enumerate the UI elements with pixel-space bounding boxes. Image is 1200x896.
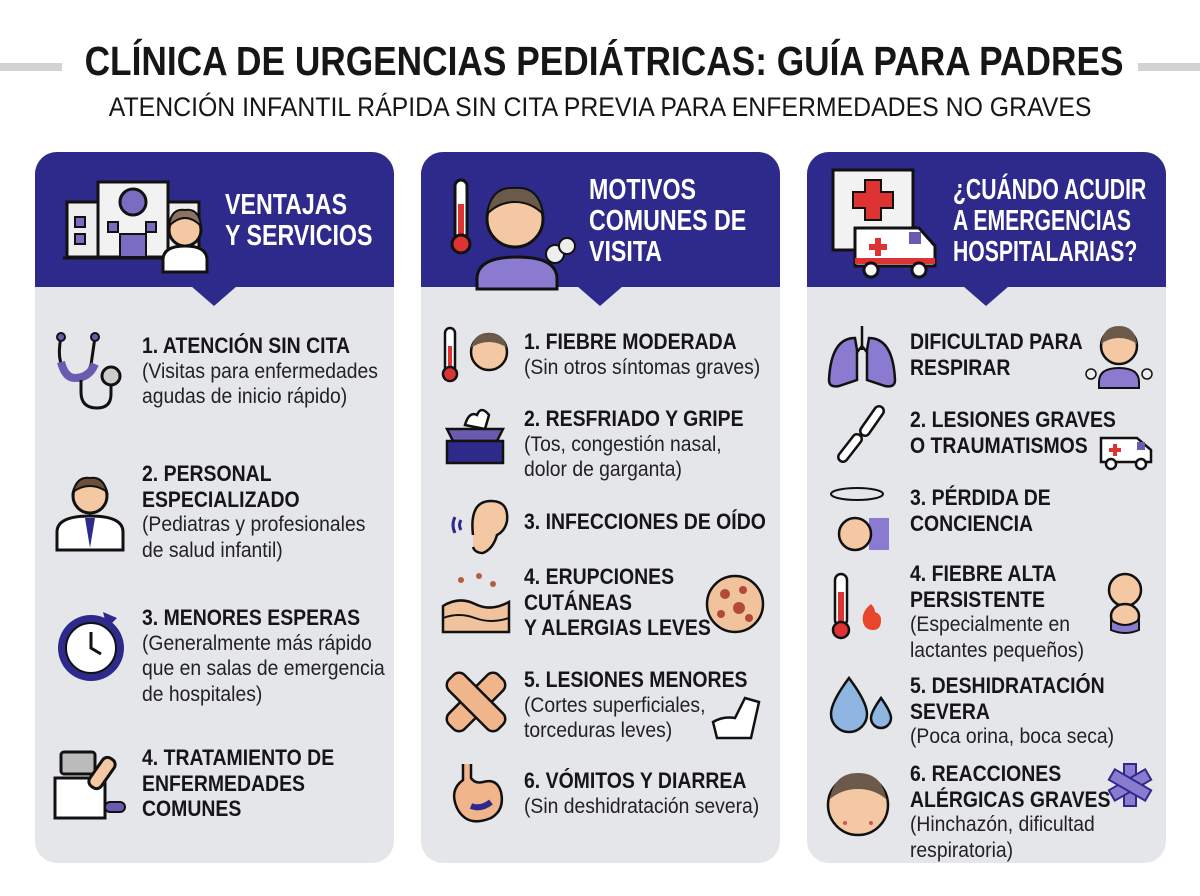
item 1: 1. ATENCIÓN SIN CITA <box>142 333 350 358</box>
item 3 <box>142 605 385 706</box>
item: resfriado: (Tos, congestión nasal, <box>524 432 722 456</box>
item 4 <box>142 745 334 821</box>
item: lesiones graves <box>910 407 1116 458</box>
panel: emergencias hospitalarias <box>807 152 1166 863</box>
subtitle: ATENCIÓN INFANTIL RÁPIDA SIN CITA PREVIA PARA ENFERMEDADES NO GRAVES <box>109 92 1091 122</box>
header text: Y SERVICIOS <box>225 220 372 252</box>
item: resfriado <box>524 406 744 481</box>
icon: water drops <box>827 674 897 734</box>
item: lesiones graves: O TRAUMATISMOS <box>910 432 1088 458</box>
item 1: (Visitas para enfermedades <box>142 360 378 382</box>
item 3: 3. MENORES ESPERAS <box>142 605 360 630</box>
item: dificultad respirar <box>910 329 1083 380</box>
item: dificultad respirar: DIFICULTAD PARA <box>910 329 1083 354</box>
item 2 <box>142 461 365 562</box>
item 4: ENFERMEDADES <box>142 770 305 796</box>
icon: clinic building with doctor <box>63 180 208 274</box>
item: reacciones alergicas: 6. REACCIONES <box>910 761 1061 786</box>
icon: swollen face <box>825 767 891 839</box>
item: deshidratacion: (Poca orina, boca seca) <box>910 725 1114 748</box>
item: fiebre alta: PERSISTENTE <box>910 586 1045 612</box>
item: fiebre moderada <box>524 329 760 378</box>
panel: motivos comunes <box>421 152 780 863</box>
item: fiebre moderada: 1. FIEBRE MODERADA <box>524 329 737 354</box>
item 2: (Pediatras y profesionales <box>142 513 365 536</box>
item 4: 4. TRATAMIENTO DE <box>142 745 334 770</box>
item 2: ESPECIALIZADO <box>142 486 300 512</box>
item: reacciones alergicas <box>910 761 1119 863</box>
icon: medical star <box>1107 762 1153 808</box>
icon: rash circle <box>706 574 764 634</box>
item: lesiones menores: (Cortes superficiales, <box>524 694 705 716</box>
icon: bandages <box>446 672 506 732</box>
item: oido: 3. INFECCIONES DE OÍDO <box>524 509 766 534</box>
item: deshidratacion: 5. DESHIDRATACIÓN <box>910 673 1105 698</box>
item: erupciones <box>524 564 711 640</box>
header text: MOTIVOS <box>589 174 696 206</box>
item: dificultad respirar: RESPIRAR <box>910 354 1010 380</box>
item: perdida conciencia: CONCIENCIA <box>910 510 1033 536</box>
icon: thermometer and face <box>442 326 508 382</box>
header text: VENTAJAS <box>225 189 347 221</box>
item 3: de hospitales) <box>142 682 262 706</box>
header text <box>953 174 1146 268</box>
icon: broken bone <box>837 405 885 463</box>
icon: ambulance <box>1100 436 1152 470</box>
item: fiebre moderada: (Sin otros síntomas graves) <box>524 356 760 378</box>
item: vomitos <box>524 768 759 818</box>
item: perdida conciencia: 3. PÉRDIDA DE <box>910 485 1051 510</box>
icon: medicine box <box>54 750 126 820</box>
item: fiebre alta <box>910 561 1084 662</box>
icon: clock <box>58 612 124 681</box>
icon: stomach <box>452 764 504 823</box>
panel header: emergencias <box>807 152 1166 287</box>
panel header: ventajas <box>35 152 394 287</box>
icon: unconscious child <box>830 487 889 552</box>
item: fiebre alta: lactantes pequeños) <box>910 638 1084 662</box>
header text: VISITA <box>589 236 662 268</box>
item: vomitos: (Sin deshidratación severa) <box>524 794 759 818</box>
item 2: de salud infantil) <box>142 538 283 562</box>
item 3: que en salas de emergencia <box>142 657 385 680</box>
title: CLÍNICA DE URGENCIAS PEDIÁTRICAS: GUÍA PARA PADRES <box>85 38 1123 84</box>
item: lesiones menores: torceduras leves) <box>524 719 672 742</box>
item: vomitos: 6. VÓMITOS Y DIARREA <box>524 768 746 793</box>
icon: ear <box>452 500 508 554</box>
item: erupciones: 4. ERUPCIONES <box>524 564 674 589</box>
icon: hospital with ambulance <box>832 168 936 278</box>
item 2: 2. PERSONAL <box>142 461 272 486</box>
icon: tissue box <box>445 408 505 464</box>
icon: stethoscope <box>56 332 122 410</box>
panel header: motivos <box>421 152 780 287</box>
item: fiebre alta: (Especialmente en <box>910 613 1070 636</box>
item 3: (Generalmente más rápido <box>142 632 372 654</box>
item: deshidratacion <box>910 673 1114 750</box>
item: reacciones alergicas: (Hinchazón, dificultad <box>910 813 1095 836</box>
item: erupciones: Y ALERGIAS LEVES <box>524 615 711 640</box>
item 1: agudas de inicio rápido) <box>142 385 347 408</box>
header text: HOSPITALARIAS? <box>953 236 1137 268</box>
item: lesiones menores: 5. LESIONES MENORES <box>524 667 748 692</box>
header text: COMUNES DE <box>589 205 746 237</box>
header text: A EMERGENCIAS <box>953 205 1131 237</box>
header text <box>589 174 746 268</box>
header text <box>225 189 372 252</box>
header text: ¿CUÁNDO ACUDIR <box>953 174 1146 206</box>
item: reacciones alergicas: ALÉRGICAS GRAVES <box>910 786 1110 812</box>
icon: distressed child <box>1085 326 1153 389</box>
icon: sick child with thermometer <box>450 178 576 290</box>
icon: bandaged arm <box>712 696 760 740</box>
icon: baby <box>1095 570 1155 640</box>
item: reacciones alergicas: respiratoria) <box>910 838 1013 862</box>
icon: lungs <box>828 326 896 388</box>
item: deshidratacion: SEVERA <box>910 698 990 724</box>
item 4: COMUNES <box>142 796 241 821</box>
item 1 <box>142 333 378 408</box>
item: erupciones: CUTÁNEAS <box>524 590 632 614</box>
item: lesiones menores <box>524 667 748 742</box>
item: resfriado: dolor de garganta) <box>524 458 682 481</box>
item: resfriado: 2. RESFRIADO Y GRIPE <box>524 406 744 431</box>
panel: ventajas y servicios <box>35 152 394 863</box>
icon: doctor <box>56 476 124 552</box>
item: lesiones graves: 2. LESIONES GRAVES <box>910 407 1116 432</box>
item: fiebre alta: 4. FIEBRE ALTA <box>910 561 1056 586</box>
item: perdida conciencia <box>910 485 1051 536</box>
icon: skin layers <box>442 573 510 634</box>
icon: thermometer with fire <box>832 572 881 640</box>
